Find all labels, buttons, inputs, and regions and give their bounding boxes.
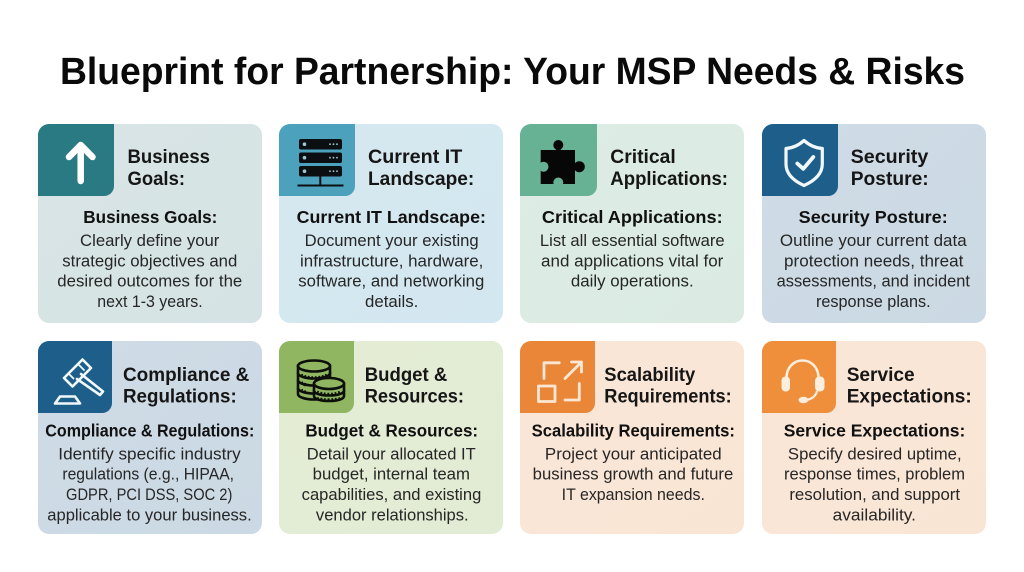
text: service expectations description: resolution, and support — [789, 486, 960, 504]
text: compliance and regulations description — [45, 420, 254, 524]
icon: headset — [762, 341, 836, 413]
heading: compliance and regulations — [123, 364, 249, 408]
text: security posture description — [777, 207, 970, 311]
text: critical applications description: Critical Applications: — [542, 207, 723, 227]
heading: service expectations: Service — [847, 364, 915, 386]
text: current IT landscape description: software, and networking — [298, 272, 484, 290]
text: scalability requirements description: Scalability Requirements: — [532, 420, 735, 440]
text: current IT landscape description — [297, 207, 486, 311]
panel: business goals — [38, 124, 262, 323]
text: service expectations description: Service Expectations: — [784, 420, 965, 440]
text: budget and resources description: vendor relationships. — [316, 506, 469, 524]
icon: up arrow — [38, 124, 114, 196]
text: security posture description: protection needs, threat — [784, 252, 964, 270]
icon: expand arrow — [520, 341, 595, 413]
text: security posture description: Outline your current data — [780, 232, 967, 250]
heading: service expectations: Expectations: — [847, 386, 972, 408]
text: security posture description: assessments, and incident — [777, 272, 970, 290]
text: budget and resources description: Budget & Resources: — [305, 420, 478, 440]
panel: budget and resources — [279, 341, 503, 534]
text: business goals description: strategic objectives and — [62, 252, 237, 270]
title: Blueprint for Partnership: Your MSP Needs & Risks — [60, 51, 965, 93]
icon: shield with check — [762, 124, 838, 196]
text: business goals description — [57, 207, 242, 311]
text: budget and resources description — [302, 420, 481, 524]
text: current IT landscape description: Document your existing — [305, 232, 479, 250]
text: current IT landscape description: Current IT Landscape: — [297, 207, 486, 227]
heading: budget and resources: Resources: — [365, 386, 464, 408]
icon: server rack — [279, 124, 355, 196]
text: business goals description: Business Goals: — [83, 207, 217, 227]
heading: critical applications: Applications: — [610, 168, 728, 190]
panel: security posture — [762, 124, 986, 323]
heading: budget and resources: Budget & — [365, 364, 447, 386]
text: budget and resources description: Detail your allocated IT — [307, 446, 476, 464]
text: scalability requirements description: IT expansion needs. — [562, 486, 705, 504]
text: scalability requirements description: Project your anticipated — [545, 446, 722, 464]
panel: service expectations — [762, 341, 986, 534]
panel: scalability requirements — [520, 341, 744, 534]
heading: security posture: Security — [851, 146, 928, 168]
text: compliance and regulations description: regulations (e.g., HIPAA, — [62, 466, 234, 484]
text: critical applications description: daily operations. — [571, 272, 694, 290]
heading: critical applications: Critical — [610, 146, 676, 168]
heading: business goals: Business — [128, 146, 210, 168]
icon: coin stacks — [279, 341, 354, 413]
heading: budget and resources — [365, 364, 464, 408]
panel: critical applications — [520, 124, 744, 323]
text: critical applications description: List all essential software — [540, 232, 725, 250]
panel: compliance and regulations — [38, 341, 262, 534]
text: scalability requirements description — [532, 420, 735, 504]
heading: service expectations — [847, 364, 972, 408]
text: budget and resources description: budget, internal team — [313, 466, 470, 484]
heading: current IT landscape: Current IT — [368, 146, 462, 168]
heading: compliance and regulations: Compliance & — [123, 364, 249, 386]
text: compliance and regulations description: Compliance & Regulations: — [45, 420, 254, 440]
text: service expectations description: Specify desired uptime, — [788, 446, 962, 464]
text: service expectations description: availability. — [833, 506, 916, 524]
heading: business goals — [128, 146, 210, 190]
icon: puzzle piece — [520, 124, 597, 196]
text: security posture description: Security Posture: — [799, 207, 948, 227]
text: service expectations description — [784, 420, 965, 524]
heading: scalability requirements — [604, 364, 732, 408]
panel: current IT landscape — [279, 124, 503, 323]
text: service expectations description: response times, problem — [784, 466, 965, 484]
text: security posture description: response plans. — [816, 293, 931, 311]
heading: scalability requirements: Scalability — [604, 364, 695, 386]
text: compliance and regulations description: GDPR, PCI DSS, SOC 2) — [66, 486, 232, 504]
text: compliance and regulations description: applicable to your business. — [47, 506, 252, 524]
text: scalability requirements description: business growth and future — [533, 466, 733, 484]
heading: security posture: Posture: — [851, 168, 929, 190]
heading: scalability requirements: Requirements: — [604, 386, 732, 408]
heading: critical applications — [610, 146, 728, 190]
text: business goals description: next 1-3 years. — [97, 293, 203, 311]
text: compliance and regulations description: Identify specific industry — [58, 446, 241, 464]
text: business goals description: desired outcomes for the — [57, 272, 242, 290]
icon: gavel — [38, 341, 112, 413]
heading: current IT landscape — [368, 146, 474, 190]
text: critical applications description — [540, 207, 725, 290]
heading: compliance and regulations: Regulations: — [123, 386, 237, 408]
heading: business goals: Goals: — [128, 168, 185, 190]
heading: security posture — [851, 146, 929, 190]
heading: current IT landscape: Landscape: — [368, 168, 474, 190]
text: business goals description: Clearly define your — [80, 232, 220, 250]
text: current IT landscape description: details. — [365, 293, 418, 311]
text: critical applications description: and applications vital for — [541, 252, 724, 270]
text: current IT landscape description: infrastructure, hardware, — [300, 252, 483, 270]
text: budget and resources description: capabilities, and existing — [302, 486, 481, 504]
